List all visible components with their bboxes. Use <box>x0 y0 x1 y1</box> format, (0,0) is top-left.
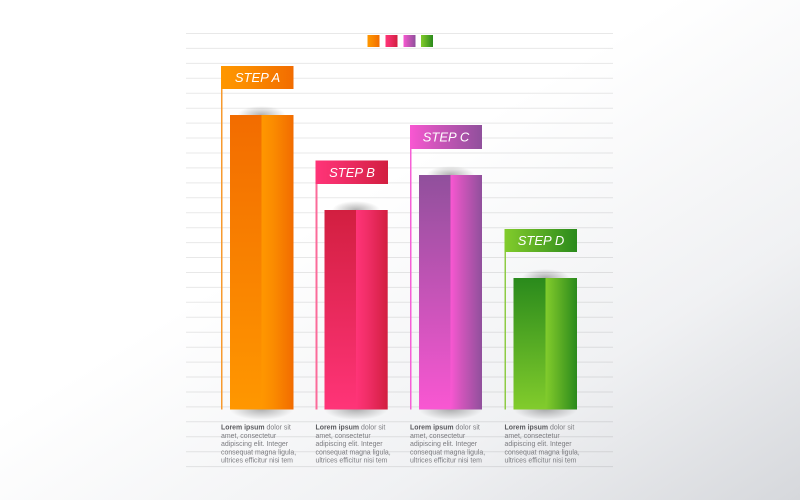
legend swatch D <box>421 35 433 47</box>
shadows <box>514 269 578 420</box>
caption: consequat magna ligula, <box>410 449 485 456</box>
legend <box>368 35 433 47</box>
bar <box>514 278 577 410</box>
flag <box>504 229 577 252</box>
column B <box>316 160 391 465</box>
shadows <box>418 166 482 420</box>
caption: adipiscing elit. Integer <box>410 441 478 448</box>
caption: ultrices efficitur nisi tem <box>504 458 577 465</box>
flag <box>316 160 388 184</box>
flag pole <box>410 125 412 410</box>
caption: ultrices efficitur nisi tem <box>221 458 293 465</box>
legend swatch C <box>404 35 416 47</box>
caption: Lorem ipsum dolor sit <box>316 424 385 432</box>
flag label: STEP C <box>423 130 470 144</box>
flag label: STEP B <box>329 165 375 180</box>
caption: amet, consectetur <box>504 433 560 440</box>
caption: amet, consectetur <box>221 433 277 440</box>
caption: ultrices efficitur nisi tem <box>316 458 388 465</box>
flag pole <box>504 229 506 410</box>
shadows <box>324 201 388 420</box>
flag pole <box>221 66 222 410</box>
flag pole <box>316 160 318 410</box>
column A <box>221 66 296 465</box>
grid lines <box>186 34 613 467</box>
flag label: STEP D <box>518 233 564 248</box>
caption: ultrices efficitur nisi tem <box>410 458 482 465</box>
legend swatch B <box>386 35 398 47</box>
caption: adipiscing elit. Integer <box>316 441 383 448</box>
caption: Lorem ipsum dolor sit <box>504 424 574 432</box>
legend swatch A <box>368 35 380 47</box>
caption: consequat magna ligula, <box>221 449 296 456</box>
bar <box>230 115 294 410</box>
flag <box>221 66 294 89</box>
column C <box>410 125 485 465</box>
bar <box>324 210 388 410</box>
caption: consequat magna ligula, <box>504 449 580 456</box>
caption: Lorem ipsum dolor sit <box>410 424 480 432</box>
caption: amet, consectetur <box>410 433 466 440</box>
caption: consequat magna ligula, <box>316 449 391 456</box>
caption: adipiscing elit. Integer <box>221 441 289 448</box>
flag label: STEP A <box>235 70 280 85</box>
shadows <box>230 106 294 420</box>
caption: amet, consectetur <box>316 433 371 440</box>
caption: adipiscing elit. Integer <box>504 441 572 448</box>
caption: Lorem ipsum dolor sit <box>221 424 291 432</box>
column D <box>504 229 580 465</box>
flag <box>410 125 482 149</box>
bar <box>419 175 482 410</box>
